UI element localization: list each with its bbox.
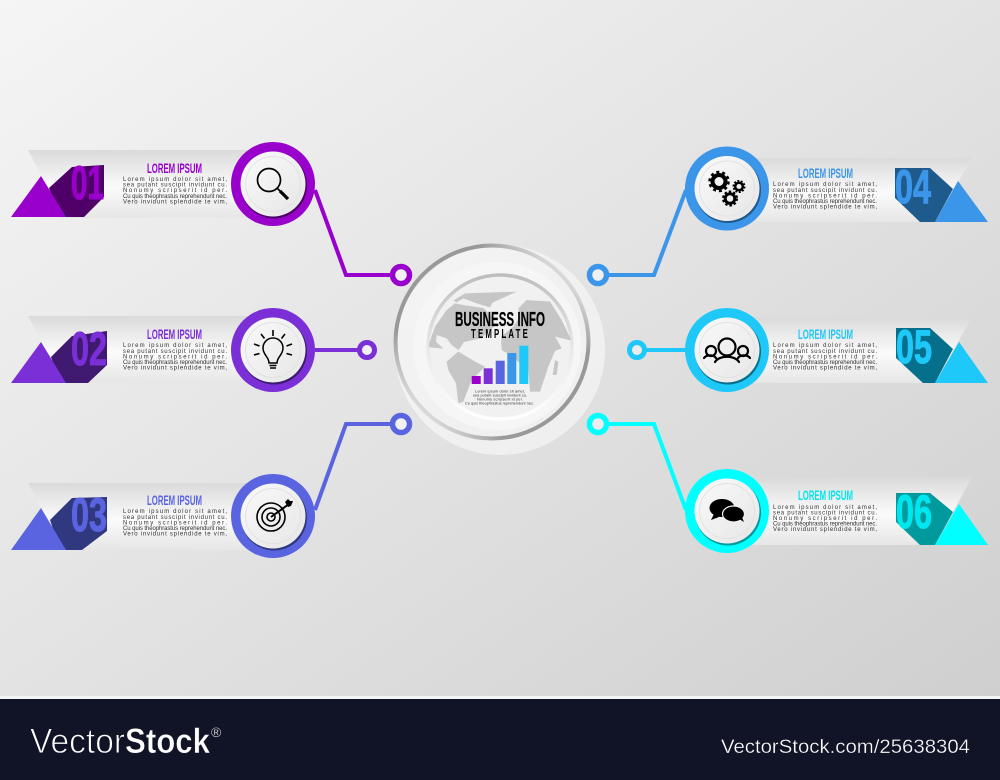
triangle 04	[935, 181, 988, 222]
panel: central globe	[395, 245, 605, 455]
outer disc	[395, 245, 605, 455]
panel: item 05	[630, 308, 988, 392]
text block 01: Cu quis theophrastus reprehendunt nec.	[123, 194, 227, 200]
text block 05: Vero invidunt splendide te vim,	[773, 366, 877, 372]
text block 02	[123, 343, 227, 372]
globe title: BUSINESS INFO	[455, 309, 545, 331]
number shadow 04	[895, 168, 953, 222]
connector 03	[315, 424, 392, 510]
text block 04: sea putant suscipit invidunt cu.	[773, 188, 877, 194]
heading 04: LOREM IPSUM	[798, 165, 853, 181]
text block 02: Lorem ipsum dolor sit amet,	[123, 343, 227, 349]
number shadow 01	[49, 165, 104, 217]
logo: Vector	[30, 722, 125, 761]
text block 02: Nonumy scripserit id per.	[123, 354, 227, 360]
icon: light bulb	[254, 330, 292, 368]
panel: item 02	[11, 308, 374, 392]
text block 05: Cu quis theophrastus reprehendunt nec.	[773, 360, 877, 366]
text block 02: Vero invidunt splendide te vim,	[123, 366, 227, 372]
heading 06: LOREM IPSUM	[798, 487, 853, 503]
number 05: 05	[896, 320, 932, 373]
icon: people	[704, 338, 750, 362]
globe caption: Cu quis theophrastus reprehendunt nec.	[465, 401, 534, 405]
text block 02: Cu quis theophrastus reprehendunt nec.	[123, 360, 227, 366]
text block 03: Cu quis theophrastus reprehendunt nec.	[123, 526, 227, 532]
text block 04: Lorem ipsum dolor sit amet,	[773, 182, 877, 188]
node 03	[392, 416, 410, 432]
node 04	[590, 266, 606, 284]
number shadow 03	[50, 497, 107, 550]
connector 01	[315, 190, 392, 275]
text block 03	[123, 509, 227, 538]
text block 05: Lorem ipsum dolor sit amet,	[773, 343, 877, 349]
text block 06: Nonumy scripserit id per.	[773, 516, 877, 522]
text block 04: Nonumy scripserit id per.	[773, 194, 877, 200]
footer: Stock	[125, 722, 210, 761]
text block 01: sea putant suscipit invidunt cu.	[123, 182, 227, 188]
node 01	[392, 266, 410, 284]
ribbon 05	[750, 317, 972, 383]
text block 04: Vero invidunt splendide te vim,	[773, 204, 877, 210]
text block 03: Lorem ipsum dolor sit amet,	[123, 509, 227, 515]
text block 06: Lorem ipsum dolor sit amet,	[773, 505, 877, 511]
heading 02: LOREM IPSUM	[147, 326, 202, 342]
connector 04	[607, 190, 686, 275]
ribbon 01	[28, 150, 250, 218]
continents	[428, 292, 572, 403]
ring 01	[231, 142, 315, 226]
number shadow 02	[51, 331, 107, 383]
triangle 06	[935, 504, 988, 545]
node 06	[590, 416, 606, 432]
triangle 02	[11, 342, 66, 383]
text block 05	[773, 343, 877, 372]
triangle 05	[935, 342, 988, 383]
connector 06	[607, 424, 686, 510]
number shadow 05	[896, 328, 953, 383]
ring 02	[231, 308, 315, 392]
text block 04: Cu quis theophrastus reprehendunt nec.	[773, 199, 877, 205]
number 04: 04	[895, 160, 931, 213]
ribbon 03	[28, 483, 250, 550]
heading 05: LOREM IPSUM	[798, 326, 853, 342]
text block 03: Nonumy scripserit id per.	[123, 520, 227, 526]
text block 04	[773, 182, 877, 210]
icon: target	[257, 499, 293, 531]
triangle 01	[11, 176, 66, 217]
footer	[0, 696, 1000, 780]
icon: chat bubbles	[710, 499, 744, 522]
number 03: 03	[71, 488, 107, 541]
inner disc	[413, 262, 581, 430]
text block 01: Vero invidunt splendide te vim,	[123, 200, 227, 206]
heading 01: LOREM IPSUM	[147, 160, 202, 176]
globe caption: Nonumy scripserit id per.	[477, 397, 523, 401]
ring 05	[685, 308, 769, 392]
triangle 03	[11, 508, 66, 550]
text block 06	[773, 505, 877, 533]
icon: gears	[710, 172, 745, 206]
ring 03	[231, 474, 315, 558]
panel: item 04	[590, 146, 988, 284]
node 02	[360, 342, 374, 358]
footer: ®	[211, 724, 222, 740]
grey ring	[396, 246, 588, 438]
icon: magnifier	[258, 168, 288, 199]
text block 06: Cu quis theophrastus reprehendunt nec.	[773, 522, 877, 528]
text block 03: Vero invidunt splendide te vim,	[123, 532, 227, 538]
panel: item 06	[590, 416, 988, 553]
globe subtitle: TEMPLATE	[471, 327, 530, 341]
ring 06	[685, 469, 769, 553]
globe caption: Lorem ipsum dolor sit amet,	[475, 390, 525, 394]
panel: item 01	[11, 142, 410, 284]
image id: VectorStock.com/25638304	[721, 736, 970, 758]
node 05	[630, 342, 644, 358]
connector 05	[645, 348, 686, 352]
globe	[428, 275, 572, 419]
number 01: 01	[71, 156, 104, 209]
text block 06: sea putant suscipit invidunt cu.	[773, 510, 877, 516]
number 02: 02	[71, 322, 107, 375]
text block 05: sea putant suscipit invidunt cu.	[773, 349, 877, 355]
text block 03: sea putant suscipit invidunt cu.	[123, 515, 227, 521]
text block 01: Nonumy scripserit id per.	[123, 188, 227, 194]
ring 04	[685, 146, 769, 230]
text block 02: sea putant suscipit invidunt cu.	[123, 349, 227, 355]
heading 03: LOREM IPSUM	[147, 492, 202, 508]
text block 01	[123, 177, 227, 206]
ribbon 02	[28, 316, 250, 383]
globe caption	[465, 390, 534, 405]
bar chart	[472, 346, 528, 384]
text block 01: Lorem ipsum dolor sit amet,	[123, 177, 227, 183]
number shadow 06	[896, 493, 953, 545]
globe caption: sea putant suscipit invidunt cu.	[473, 394, 527, 398]
panel: item 03	[11, 416, 410, 558]
text block 06: Vero invidunt splendide te vim,	[773, 527, 877, 533]
text block 05: Nonumy scripserit id per.	[773, 354, 877, 360]
ribbon 06	[750, 477, 972, 545]
connector 02	[315, 348, 358, 352]
number 06: 06	[896, 485, 932, 538]
ribbon 04	[750, 158, 972, 222]
